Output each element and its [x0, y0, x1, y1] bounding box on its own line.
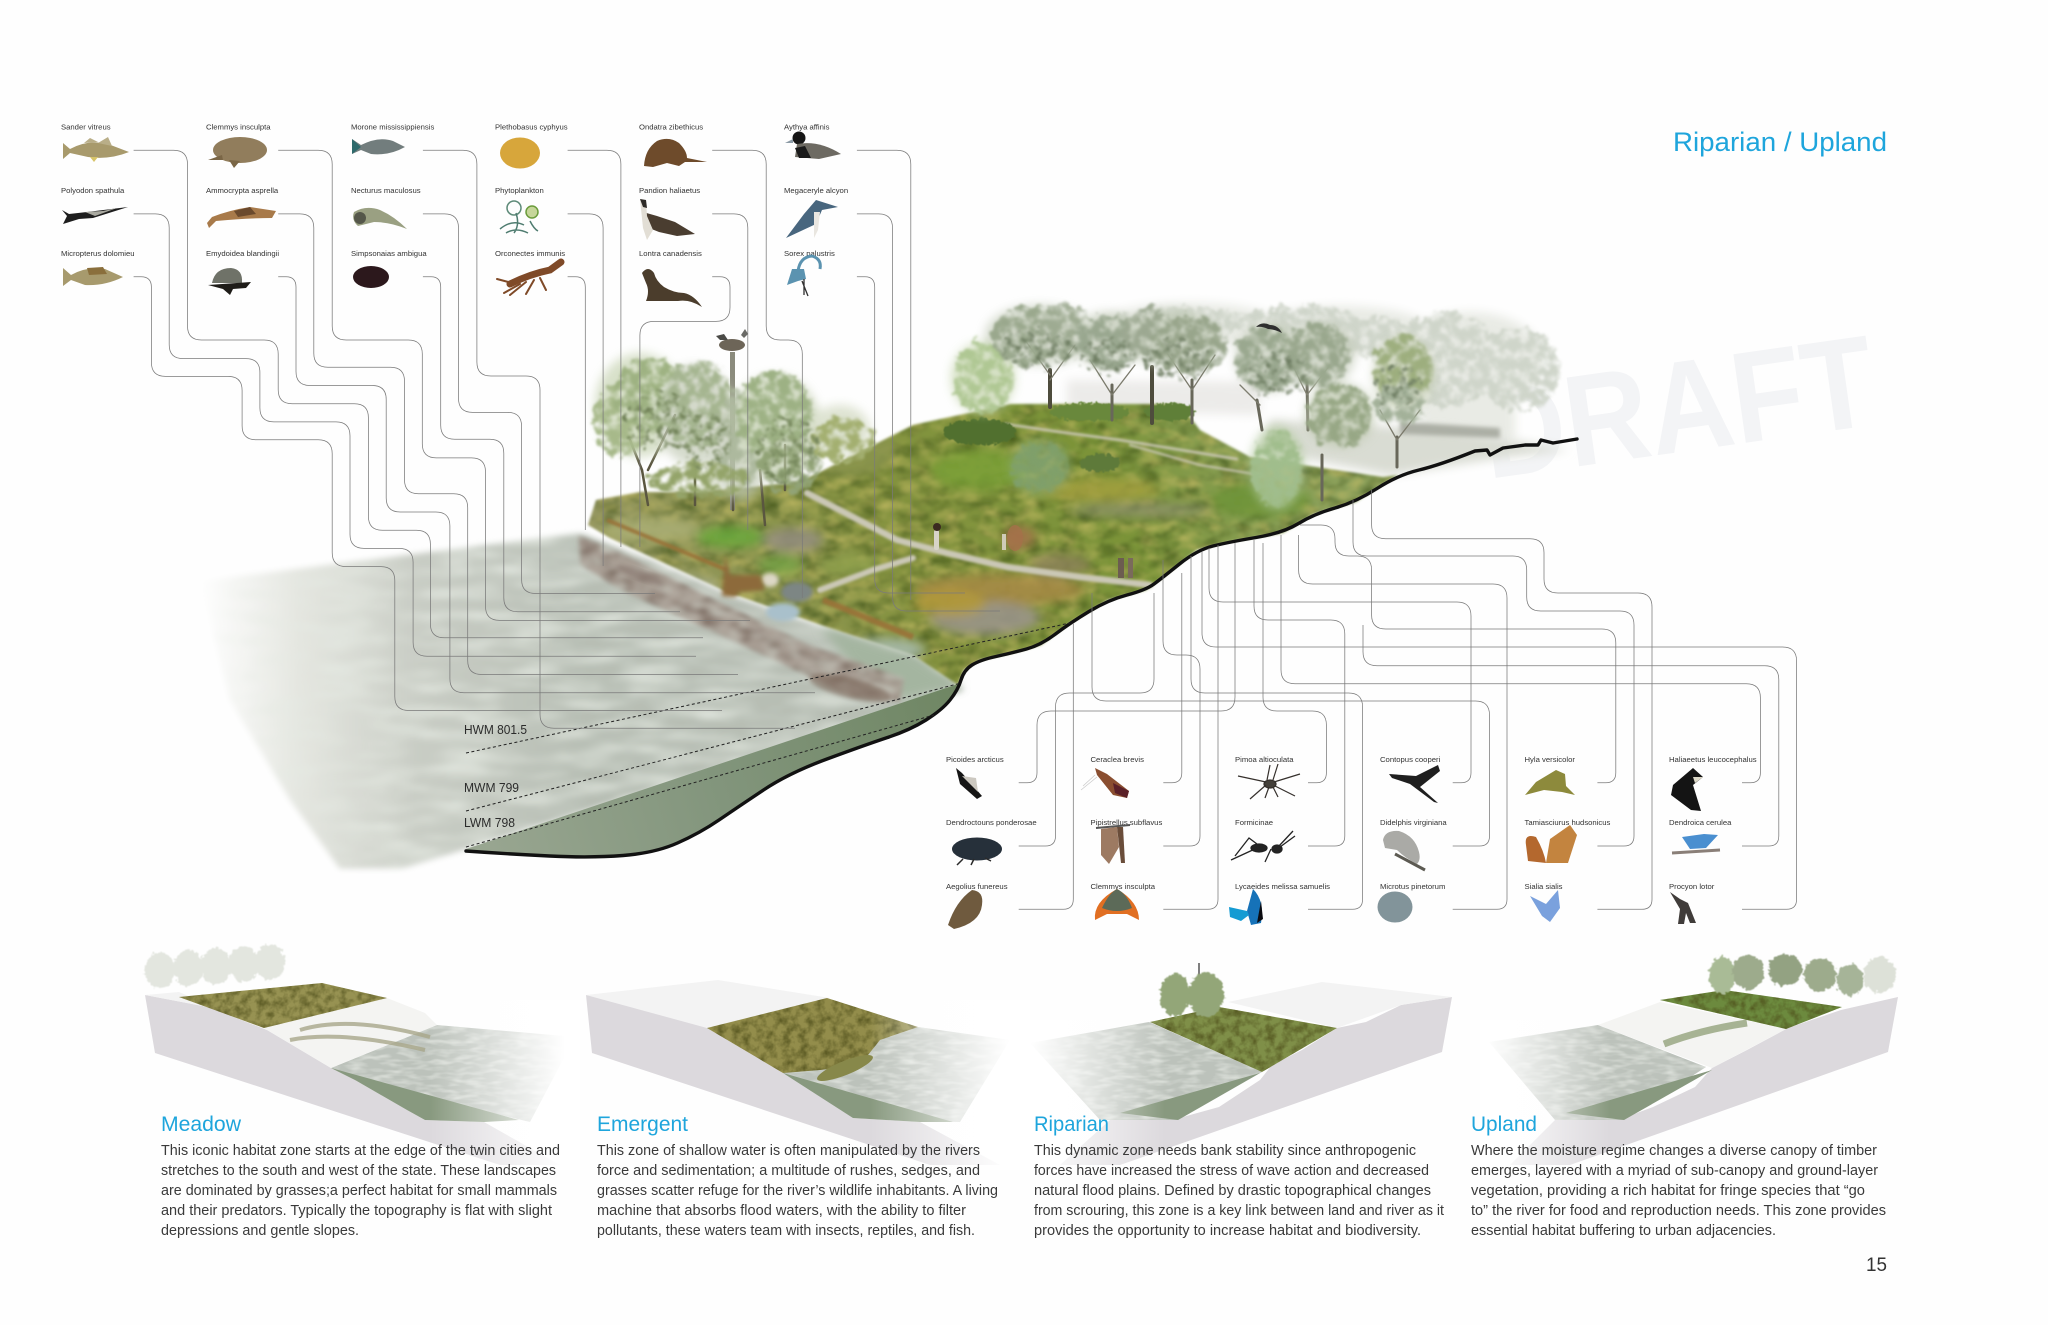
diagram: Meadow zone block — [145, 944, 580, 1170]
species: Tamiasciurus hudsonicus: Tamiasciurus hudsonicus — [1524, 818, 1611, 827]
upper white terrain — [586, 980, 830, 1028]
diagram: Riparian zone block — [1020, 963, 1452, 1170]
species: Dendroica cerulea: Dendroica cerulea — [1669, 818, 1732, 827]
species: Simpsonaias ambigua: Simpsonaias ambigua — [351, 249, 427, 258]
species: Procyon lotor: Procyon lotor — [1669, 882, 1715, 891]
submerged bed — [1566, 1070, 1712, 1120]
species: Sander vitreus: Sander vitreus — [61, 122, 111, 132]
text block: Upland: essential habitat buffering to urban adjacencies. — [1471, 1223, 1776, 1239]
vegetated bank — [580, 400, 1410, 700]
species: Ammocrypta asprella: Ammocrypta asprella — [206, 186, 279, 195]
species: Didelphis virginiana — [1380, 818, 1447, 870]
species: Phytoplankton: Phytoplankton — [495, 186, 544, 195]
rocky shoreline band — [578, 535, 905, 708]
species: Sialia sialis — [1524, 882, 1563, 922]
emergent wetland vegetation — [707, 998, 918, 1086]
species: Pimoa altioculata: Pimoa altioculata — [1235, 755, 1294, 764]
water level: MWM — [464, 683, 961, 811]
text block: Riparian: natural flood plains. Defined by drastic topographical changes — [1034, 1183, 1431, 1199]
left edge fade — [1020, 1020, 1170, 1170]
species: Polyodon spathula — [61, 186, 128, 224]
right edge fade — [870, 1000, 1030, 1170]
species: Clemmys insculpta: Clemmys insculpta — [206, 122, 271, 132]
species: Aythya affinis: Aythya affinis — [784, 122, 830, 132]
species: Contopus cooperi: Contopus cooperi — [1380, 755, 1441, 764]
distant road and wall — [1067, 380, 1570, 475]
upland tree trunks — [1025, 340, 1420, 500]
species: Microtus pinetorum: Microtus pinetorum — [1380, 882, 1445, 891]
water level: LWM: LWM 798 — [464, 816, 515, 830]
section cut line — [466, 439, 1577, 857]
species: Simpsonaias ambigua — [351, 249, 427, 288]
species: Sialia sialis: Sialia sialis — [1524, 882, 1563, 891]
meadow vegetation parcel — [179, 983, 387, 1028]
species: Emydoidea blandingii — [206, 249, 279, 295]
species: Morone mississippiensis: Morone mississippiensis — [351, 122, 434, 132]
species: Clemmys insculpta — [206, 122, 271, 168]
riparian vegetation — [1150, 1007, 1337, 1072]
diagram: Upland zone block — [1480, 954, 1898, 1170]
text block: Upland: emerges, layered with a myriad of sub-canopy and ground-layer — [1471, 1163, 1878, 1179]
deer on the bank — [722, 555, 765, 597]
species: Morone mississippiensis — [351, 122, 434, 154]
text block: Meadow: stretches to the south and west of the state. These landscapes — [161, 1163, 556, 1179]
water level: MWM: MWM 799 — [464, 781, 519, 795]
species: Microtus pinetorum — [1378, 882, 1445, 922]
text block: Riparian: This dynamic zone needs bank stability since anthropogenic — [1034, 1143, 1416, 1159]
seep streams — [290, 1024, 430, 1050]
species: Ondatra zibethicus — [639, 122, 707, 167]
text block: Upland: Where the moisture regime changes a diverse canopy of timber — [1471, 1143, 1877, 1159]
right edge fade — [420, 1000, 580, 1170]
species: Sander vitreus — [61, 122, 129, 162]
text block: Emergent: grasses scatter refuge for the river’s wildlife inhabitants. A living — [597, 1183, 998, 1199]
osprey nest on pole — [716, 329, 748, 510]
species: Pipistrellus subflavus: Pipistrellus subflavus — [1090, 818, 1162, 827]
text block: Riparian: from scrouring, this zone is a key link between land and river as it — [1034, 1203, 1444, 1219]
page number: 15 — [1866, 1255, 1887, 1276]
species: Lontra canadensis: Lontra canadensis — [639, 249, 702, 258]
text block: Upland: to” the river for food and reproduction needs. This zone provides — [1471, 1203, 1886, 1219]
upland tree canopy — [1709, 954, 1896, 996]
species: Haliaeetus leucocephalus — [1669, 755, 1757, 811]
species: Ondatra zibethicus: Ondatra zibethicus — [639, 122, 703, 132]
river surface — [331, 1025, 575, 1122]
species: Polyodon spathula: Polyodon spathula — [61, 186, 125, 195]
block cut face — [145, 995, 560, 1165]
upland vegetation parcel — [1660, 990, 1842, 1029]
species: Hyla versicolor — [1524, 755, 1575, 795]
species: Tamiasciurus hudsonicus — [1524, 818, 1611, 863]
text block: Riparian: forces have increased the stress of wave action and decreased — [1034, 1163, 1429, 1179]
block cut face — [586, 995, 1000, 1165]
species: Procyon lotor — [1669, 882, 1715, 924]
cascade and stream — [761, 573, 813, 621]
species: Ammocrypta asprella — [206, 186, 279, 228]
species: Formicinae — [1231, 818, 1295, 862]
species: Micropterus dolomieu — [61, 249, 134, 286]
text block: Meadow: This iconic habitat zone starts at the edge of the twin cities and — [161, 1143, 560, 1159]
species: Megaceryle alcyon — [784, 186, 848, 238]
species: Sorex palustris — [784, 249, 835, 296]
river water surface — [200, 533, 965, 869]
text block: Riparian — [1034, 1113, 1444, 1239]
riparian tree trunks — [630, 415, 785, 525]
upland tree canopy — [951, 302, 1433, 447]
species: Aegolius funereus — [946, 882, 1008, 929]
connector lines: lower species to hillside — [1019, 490, 1797, 909]
watermark: DRAFT: DRAFT — [1472, 307, 1883, 507]
water level: HWM — [464, 623, 1070, 753]
upland understory bushes — [944, 403, 1304, 510]
text block: Meadow — [161, 1113, 560, 1239]
text block: Emergent: Emergent — [597, 1113, 688, 1136]
river surface — [783, 1027, 1010, 1122]
text block: Riparian: Riparian — [1034, 1113, 1109, 1136]
riparian trees and nest pole — [1160, 963, 1224, 1017]
species: Necturus maculosus: Necturus maculosus — [351, 186, 421, 195]
submerged river bed — [466, 683, 961, 857]
water level: LWM — [464, 715, 934, 847]
shallow mint margin of the bank — [820, 625, 962, 700]
species: Lontra canadensis — [639, 249, 702, 307]
species: Dendroica cerulea — [1669, 818, 1732, 853]
timber edging along the bank — [607, 520, 913, 637]
species: Plethobasus cyphyus: Plethobasus cyphyus — [495, 122, 568, 132]
text block: Emergent: force and sedimentation; a multitude of rushes, sedges, and — [597, 1163, 980, 1179]
green seep — [1664, 1023, 1747, 1044]
connector lines: upper species to river section — [134, 150, 1000, 728]
text block: Meadow: and their predators. Typically the topography is flat with slight — [161, 1203, 552, 1219]
species: Pandion haliaetus: Pandion haliaetus — [639, 186, 700, 195]
white mid terrain — [264, 998, 437, 1068]
text block: Meadow: Meadow — [161, 1113, 242, 1136]
species: Clemmys insculpta, lower — [1090, 882, 1156, 920]
species: Dendroctonus ponderosae — [946, 818, 1037, 865]
species: Pipistrellus subflavus — [1090, 818, 1162, 864]
text block: Upland — [1471, 1113, 1886, 1239]
text block: Emergent: pollutants, these waters team with insects, reptiles, and fish. — [597, 1223, 975, 1239]
submerged bed — [783, 1073, 953, 1122]
text block: Emergent: This zone of shallow water is often manipulated by the rivers — [597, 1143, 980, 1159]
walking paths — [807, 424, 1260, 590]
upper white terrain — [145, 992, 264, 1028]
submerged bed — [331, 1068, 519, 1122]
text block: Meadow: depressions and gentle slopes. — [161, 1223, 359, 1239]
species: Pimoa altioculata — [1235, 755, 1300, 799]
text block: Emergent: machine that absorbs flood waters, with the ability to filter — [597, 1203, 966, 1219]
species: Haliaeetus leucocephalus: Haliaeetus leucocephalus — [1669, 755, 1757, 764]
block cut face — [1060, 997, 1452, 1165]
species: Pandion haliaetus — [639, 186, 700, 240]
left edge fade — [1480, 1020, 1610, 1170]
species: Plethobasus cyphyus — [495, 122, 568, 168]
submerged bed — [1120, 1073, 1260, 1120]
white terrace terrain — [1598, 1002, 1786, 1068]
river surface — [1489, 1025, 1706, 1120]
species: Aythya affinis — [784, 122, 841, 159]
species: Lycaeides melissa samuelis — [1229, 882, 1330, 925]
species: Formicinae: Formicinae — [1235, 818, 1273, 827]
upper white terrain — [1228, 982, 1452, 1028]
text block: Riparian: provides the opportunity to increase habitat and biodiversity. — [1034, 1223, 1421, 1239]
people on path — [933, 523, 1133, 578]
species: Orconectes immunis: Orconectes immunis — [495, 249, 565, 258]
text block: Upland: Upland — [1471, 1113, 1537, 1136]
text block: Upland: vegetation, providing a rich habitat for fringe species that “go — [1471, 1183, 1865, 1199]
species: Aegolius funereus: Aegolius funereus — [946, 882, 1008, 891]
panel: main river section landscape — [200, 302, 1577, 869]
diagram: Emergent zone block — [586, 980, 1030, 1170]
title: Riparian / Upland — [1673, 127, 1887, 157]
species: Ceraclea brevis — [1081, 755, 1144, 798]
species: Clemmys insculpta, lower: Clemmys insculpta — [1090, 882, 1156, 891]
species: Orconectes immunis — [495, 249, 565, 295]
species: Didelphis virginiana: Didelphis virginiana — [1380, 818, 1447, 827]
species: Sorex palustris: Sorex palustris — [784, 249, 835, 258]
water level: HWM: HWM 801.5 — [464, 723, 527, 737]
species: Micropterus dolomieu: Micropterus dolomieu — [61, 249, 134, 258]
species: Emydoidea blandingii: Emydoidea blandingii — [206, 249, 279, 258]
species: Picoides arcticus: Picoides arcticus — [946, 755, 1004, 764]
species: Contopus cooperi — [1380, 755, 1441, 803]
block cut face — [1510, 997, 1898, 1165]
species: Picoides arcticus — [946, 755, 1004, 799]
riparian trees — [594, 353, 877, 500]
species: Phytoplankton — [495, 186, 544, 233]
distant wall — [1400, 422, 1500, 438]
text block: Emergent — [597, 1113, 998, 1239]
species: Megaceryle alcyon: Megaceryle alcyon — [784, 186, 848, 195]
species: Dendroctonus ponderosae: Dendroctouns ponderosae — [946, 818, 1037, 827]
background tree row — [145, 944, 285, 988]
species: Lycaeides melissa samuelis: Lycaeides melissa samuelis — [1235, 882, 1330, 891]
bird over canopy — [1256, 323, 1282, 333]
river surface — [1030, 1022, 1262, 1120]
species: Ceraclea brevis: Ceraclea brevis — [1090, 755, 1144, 764]
far background trees — [1100, 303, 1560, 440]
text block: Meadow: are dominated by grasses;a perfect habitat for small mammals — [161, 1183, 557, 1199]
species: Necturus maculosus — [351, 186, 421, 229]
species: Hyla versicolor: Hyla versicolor — [1524, 755, 1575, 764]
